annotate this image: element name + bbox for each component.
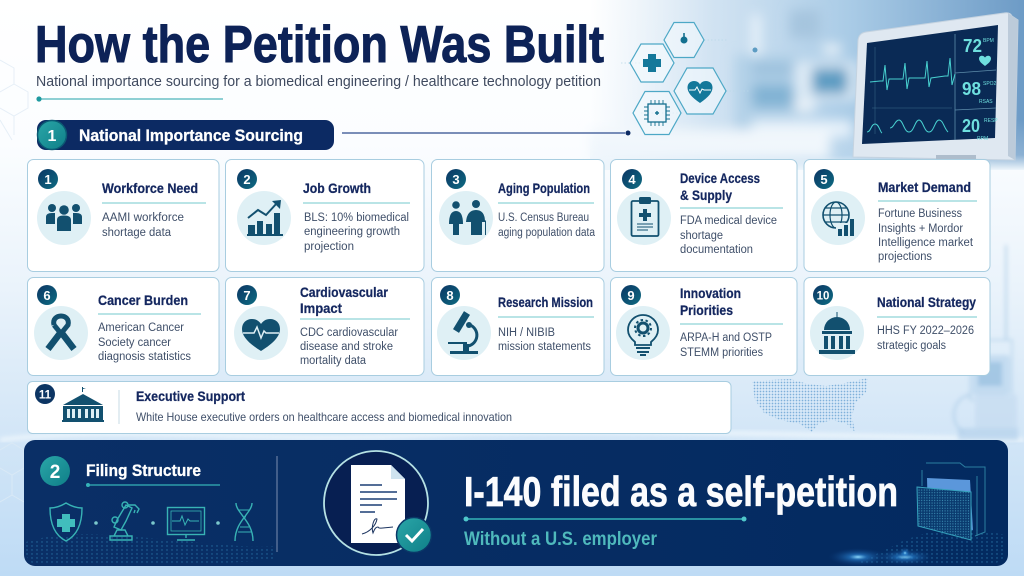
card 11: executive support xyxy=(28,382,731,434)
icon: lightbulb with gear xyxy=(628,315,658,356)
card 8: research mission xyxy=(432,278,604,376)
card 7: cardiovascular impact: CDC cardiovascular xyxy=(300,327,398,339)
hexagon: medical cross xyxy=(630,44,674,82)
section number badge: 1 xyxy=(48,128,57,145)
card 9: innovation priorities: Innovation xyxy=(680,285,741,301)
card 9: innovation priorities: 9 xyxy=(627,288,635,303)
check badge xyxy=(396,518,432,552)
icon: digital folder xyxy=(917,463,985,540)
card 10: national strategy: 10 xyxy=(817,290,829,302)
card 1: workforce need xyxy=(28,160,219,272)
section 2 badge xyxy=(40,456,70,486)
hexagon: pin xyxy=(664,22,704,58)
card 3: aging population: 3 xyxy=(452,172,460,187)
monitor screen: 72 xyxy=(963,36,982,56)
card 7: cardiovascular impact: Impact xyxy=(300,300,342,316)
statement rule xyxy=(464,516,746,522)
filing structure banner xyxy=(24,440,1008,566)
monitor screen: 98 xyxy=(962,79,981,99)
card 5: market demand: Market Demand xyxy=(878,179,971,195)
card 2: job growth: engineering growth xyxy=(304,226,400,238)
section 2 heading: Filing Structure xyxy=(86,461,201,480)
card 3: aging population: aging population data xyxy=(498,227,596,239)
icon: robot arm xyxy=(110,502,139,540)
icon: elderly couple xyxy=(449,200,486,235)
card 6: cancer burden: Cancer Burden xyxy=(98,292,188,308)
network glow xyxy=(828,525,1006,566)
main filing statement: I-140 filed as a self-petition xyxy=(464,468,898,515)
card 6: cancer burden: American Cancer xyxy=(98,322,184,334)
card 7: cardiovascular impact: mortality data xyxy=(300,355,367,367)
icon: clipboard xyxy=(632,197,658,236)
card 3: aging population: U.S. Census Bureau xyxy=(498,212,589,224)
card 1: workforce need: 1 xyxy=(44,172,52,187)
card 2: job growth xyxy=(226,160,424,272)
card 5: market demand xyxy=(804,160,990,272)
card 6: cancer burden: 6 xyxy=(43,288,51,303)
icon: shield with cross xyxy=(50,503,82,541)
icon: capitol building xyxy=(819,312,855,354)
card 2: job growth: projection xyxy=(304,241,354,253)
icon: awareness ribbon xyxy=(48,316,74,349)
card 2: job growth: 2 xyxy=(243,172,251,187)
card 8: research mission: 8 xyxy=(446,288,454,303)
card 10: national strategy: HHS FY 2022–2026 xyxy=(877,325,974,337)
card 6: cancer burden: diagnosis statistics xyxy=(98,351,191,363)
monitor screen: SPO2 xyxy=(983,81,997,87)
card 11: executive support: 11 xyxy=(39,390,52,402)
card 10: national strategy: strategic goals xyxy=(877,340,946,352)
card 4: device access and supply: documentation xyxy=(680,244,753,256)
patient monitor xyxy=(853,13,1018,160)
icon: microscope xyxy=(448,313,478,354)
card 4: device access and supply: Device Access xyxy=(680,170,760,186)
section rule with end dot xyxy=(342,130,630,136)
title accent line xyxy=(36,96,223,102)
card 1: workforce need: shortage data xyxy=(102,227,172,239)
icon: DNA helix xyxy=(235,503,253,541)
card 9: innovation priorities: ARPA-H and OSTP xyxy=(680,332,772,344)
card 4: device access and supply xyxy=(610,160,797,272)
card 8: research mission: NIH / NIBIB xyxy=(498,327,555,339)
hexagon icon cluster xyxy=(620,22,758,134)
section 1 header xyxy=(37,120,334,150)
icon: heart with pulse xyxy=(242,319,280,351)
card 6: cancer burden: Society cancer xyxy=(98,337,171,349)
icon: globe with bars xyxy=(823,202,858,237)
icon: white house xyxy=(62,387,104,422)
card 10: national strategy: National Strategy xyxy=(877,294,976,310)
card 4: device access and supply: shortage xyxy=(680,230,723,242)
card 9: innovation priorities xyxy=(610,278,797,376)
card 5: market demand: Insights + Mordor xyxy=(878,223,963,235)
card 1: workforce need: AAMI workforce xyxy=(102,212,184,224)
title: How the Petition Was Built xyxy=(35,16,604,74)
monitor screen: RESP xyxy=(984,118,998,124)
card 11: executive support: Executive Support xyxy=(136,388,245,404)
monitor screen: RSAS xyxy=(979,99,993,105)
card 6: cancer burden xyxy=(28,278,219,376)
card 9: innovation priorities: Priorities xyxy=(680,302,733,318)
decorative hexagon network left xyxy=(0,60,28,502)
card 5: market demand: Fortune Business xyxy=(878,208,962,220)
document signed icon xyxy=(324,451,432,555)
icon: vitals monitor xyxy=(168,508,204,540)
card 7: cardiovascular impact: disease and stroke xyxy=(300,341,393,353)
card 2: job growth: BLS: 10% biomedical xyxy=(304,212,409,224)
card 7: cardiovascular impact: Cardiovascular xyxy=(300,284,388,300)
card 11: executive support: White House executive orders on healthcare access and biomedical innovation xyxy=(136,410,512,424)
card 1: workforce need: Workforce Need xyxy=(102,180,198,196)
dotted USA map xyxy=(752,378,868,432)
medical equipment watermark xyxy=(954,245,1018,440)
hexagon: chip xyxy=(633,92,681,134)
card 3: aging population: Aging Population xyxy=(498,180,590,196)
section number badge xyxy=(38,120,66,150)
card 8: research mission: mission statements xyxy=(498,341,591,353)
card 2: job growth: Job Growth xyxy=(303,180,371,196)
monitor screen: BPM xyxy=(983,38,994,44)
card 7: cardiovascular impact: 7 xyxy=(243,288,251,303)
employer note: Without a U.S. employer xyxy=(464,529,658,550)
card 8: research mission: Research Mission xyxy=(498,294,593,310)
section 2 badge: 2 xyxy=(50,462,60,483)
hexagon: heart xyxy=(674,68,726,114)
card 9: innovation priorities: STEMM priorities xyxy=(680,347,763,359)
section 1 header: National Importance Sourcing xyxy=(79,126,303,145)
card 10: national strategy xyxy=(804,278,990,376)
icon: rising bar chart xyxy=(247,200,283,236)
card 4: device access and supply: & Supply xyxy=(680,187,732,203)
monitor screen: RPM xyxy=(977,136,988,142)
card 5: market demand: Intelligence market xyxy=(878,237,974,249)
card 5: market demand: 5 xyxy=(820,172,828,187)
card 4: device access and supply: 4 xyxy=(628,172,636,187)
icon: group of people xyxy=(46,204,82,231)
card 4: device access and supply: FDA medical device xyxy=(680,215,777,227)
card 7: cardiovascular impact xyxy=(226,278,424,376)
monitor screen xyxy=(862,25,998,144)
subtitle: National importance sourcing for a biomedical engineering / healthcare technology petition xyxy=(36,73,601,90)
monitor screen: 20 xyxy=(962,116,980,136)
card 5: market demand: projections xyxy=(878,251,932,263)
section 2 heading xyxy=(86,461,220,487)
card 3: aging population xyxy=(432,160,604,272)
